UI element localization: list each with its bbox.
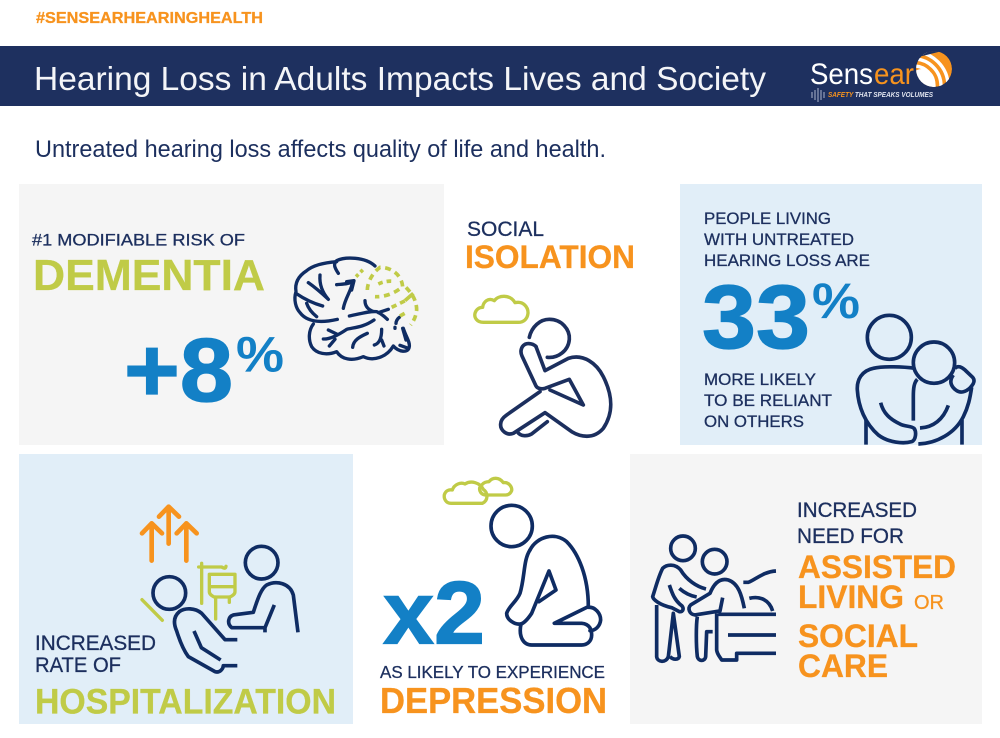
logo tagline: SAFETY THAT SPEAKS VOLUMES — [828, 90, 933, 99]
logo emblem — [916, 51, 952, 87]
icon: cloud — [475, 296, 528, 322]
assisted living heading: ASSISTED — [798, 549, 956, 585]
hospitalization label: RATE OF — [35, 654, 121, 677]
dementia label: #1 MODIFIABLE RISK OF — [32, 230, 245, 250]
stat: +8%: % — [236, 326, 284, 382]
assisted living heading — [798, 549, 956, 684]
subtitle: Untreated hearing loss affects quality of life and health. — [35, 136, 606, 163]
icon: kneeling person — [491, 505, 601, 645]
stat: x2: x2 — [383, 562, 485, 662]
assisted living intro: INCREASED — [797, 499, 917, 522]
reliant closing text: ON OTHERS — [704, 412, 804, 431]
reliant intro text: WITH UNTREATED — [704, 230, 854, 249]
assisted living heading: OR — [914, 592, 944, 614]
patient and carer figures — [153, 546, 298, 672]
panel: hospitalization — [19, 454, 353, 724]
stat: +8% — [124, 321, 284, 421]
stat: 33% — [702, 268, 860, 368]
icon: IV drip — [142, 563, 235, 620]
logo sound wave — [812, 88, 824, 102]
icon: up arrows — [142, 507, 197, 561]
reliant intro text — [704, 209, 870, 270]
panel: social isolation — [465, 218, 635, 436]
icon: brain — [295, 258, 417, 359]
logo wordmark — [810, 58, 914, 91]
assisted living heading: SOCIAL — [798, 618, 918, 654]
header banner — [0, 46, 1000, 106]
assisted living heading: LIVING — [798, 579, 904, 615]
panel: depression — [380, 478, 607, 721]
panel: reliant on others — [680, 184, 982, 445]
depression label: AS LIKELY TO EXPERIENCE — [380, 662, 605, 682]
title: Hearing Loss in Adults Impacts Lives and Society — [34, 60, 766, 97]
hospitalization label: INCREASED — [35, 632, 156, 655]
social label: SOCIAL — [467, 218, 544, 241]
icon: clouds — [444, 478, 512, 503]
hospitalization label — [35, 632, 156, 677]
icon: carer assisting person in bed — [653, 536, 776, 661]
stat: +8%: +8 — [124, 321, 233, 421]
panel: assisted living — [630, 454, 982, 724]
icon: embracing people — [857, 315, 974, 445]
reliant closing text: MORE LIKELY — [704, 370, 816, 389]
reliant intro text: PEOPLE LIVING — [704, 209, 831, 228]
panel: dementia — [19, 184, 444, 445]
dementia heading: DEMENTIA — [33, 251, 265, 300]
assisted living heading: CARE — [798, 648, 888, 684]
isolation heading: ISOLATION — [465, 239, 635, 275]
assisted living intro: NEED FOR — [797, 525, 904, 548]
reliant intro text: HEARING LOSS ARE — [704, 251, 870, 270]
logo wordmark: Sens — [810, 58, 873, 91]
reliant closing text — [704, 370, 832, 431]
hospitalization heading: HOSPITALIZATION — [35, 682, 336, 722]
stat: 33%: 33 — [702, 268, 810, 368]
stat: 33%: % — [812, 273, 860, 329]
icon: sitting person — [501, 319, 611, 436]
assisted living intro — [797, 499, 917, 548]
hashtag: #SENSEARHEARINGHEALTH — [36, 10, 263, 27]
depression heading: DEPRESSION — [380, 680, 607, 721]
logo wordmark: ear — [874, 58, 914, 91]
logo: Sensear — [811, 51, 952, 102]
reliant closing text: TO BE RELIANT — [704, 391, 832, 410]
icon: hospital patient and carer — [142, 507, 298, 672]
